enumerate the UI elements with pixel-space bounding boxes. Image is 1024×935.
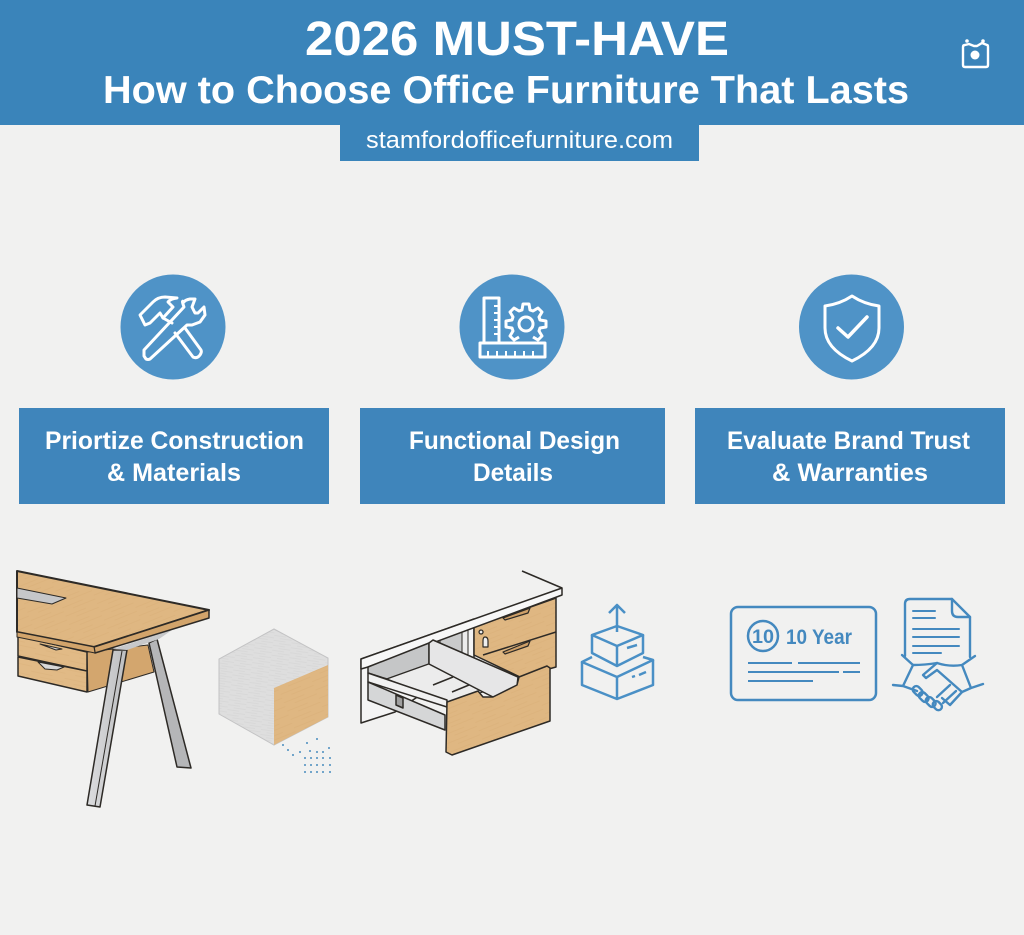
rear leg (149, 639, 191, 768)
drawer handles (38, 644, 64, 670)
label box: functional design: Details (473, 459, 553, 487)
front leg (87, 650, 127, 807)
title line two: How to Choose Office Furniture That Lasts (103, 69, 909, 112)
icon: warranty card: 10 (752, 627, 774, 648)
website tab (340, 125, 699, 161)
drawer front (446, 666, 550, 755)
cabinet frame (361, 619, 474, 723)
label box: functional design: Functional Design (409, 427, 620, 455)
icon: contract and handshake (893, 599, 983, 712)
gap behind drawer (440, 630, 462, 655)
label box: brand trust (695, 408, 1005, 504)
leg bracket (113, 630, 172, 650)
drawer floor (387, 664, 483, 702)
label box: construction and materials (19, 408, 329, 504)
drawer side wall (429, 640, 518, 697)
illustration: desk (17, 571, 209, 807)
side panel (87, 645, 154, 692)
icon: ruler and gear (460, 274, 564, 380)
cable slot (17, 588, 66, 604)
drawers (18, 636, 87, 692)
desk top (17, 571, 209, 647)
worktop (361, 588, 562, 669)
icon: shield with check (799, 274, 904, 380)
icon: warranty card: 10 Year (786, 626, 852, 649)
icon: stacked boxes with arrow (582, 605, 653, 699)
upper drawer handles (503, 608, 530, 654)
illustration: material cube (219, 629, 331, 773)
header banner (0, 0, 1024, 125)
website tab: stamfordofficefurniture.com (366, 127, 673, 154)
icon: camera (963, 39, 988, 67)
illustration: open drawer (361, 571, 562, 755)
title line one: 2026 MUST-HAVE (305, 13, 729, 66)
drawer near rail (368, 673, 447, 707)
label box: construction and materials: & Materials (107, 459, 241, 487)
label box: construction and materials: Priortize Construction (45, 427, 304, 455)
icon: warranty card (731, 607, 876, 700)
label box: brand trust: & Warranties (772, 459, 928, 487)
icon: hammer and wrench (120, 274, 226, 380)
lock (479, 630, 488, 647)
drawer back wall (368, 643, 429, 679)
dust dots (282, 738, 331, 773)
label box: brand trust: Evaluate Brand Trust (727, 427, 971, 455)
label box: functional design (360, 408, 665, 504)
upper drawers (474, 598, 556, 677)
